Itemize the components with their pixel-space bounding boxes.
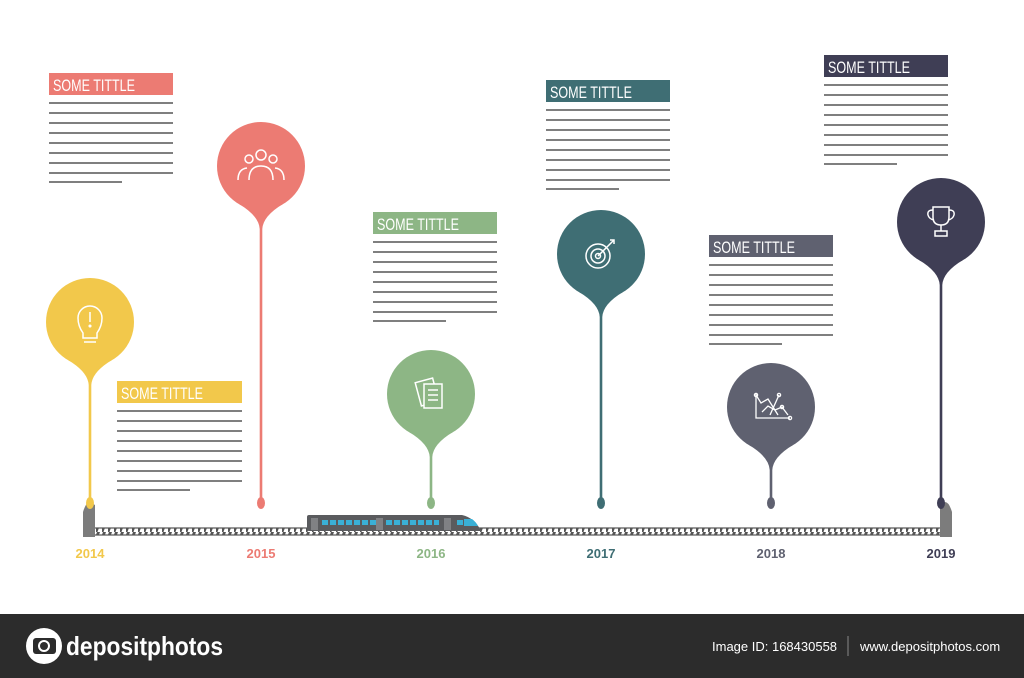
logo: depositphotos [66, 631, 223, 661]
text block 2018 [709, 235, 833, 344]
text block 2016 [373, 212, 497, 321]
text block 2017 [546, 80, 670, 189]
text block 2016: SOME TITTLE [377, 215, 459, 234]
icon: target [586, 240, 614, 268]
icon: team [238, 150, 284, 180]
text block 2019 [824, 55, 948, 164]
years: 2016 [417, 546, 445, 561]
text block 2014: SOME TITTLE [121, 384, 203, 403]
train [307, 515, 481, 531]
years: 2018 [757, 546, 785, 561]
text block 2018: SOME TITTLE [713, 238, 795, 257]
footer bar: www.depositphotos.com [859, 639, 1000, 654]
pin 2016 [387, 350, 475, 509]
text block 2014 [117, 381, 242, 490]
pin 2019 [897, 178, 985, 509]
icon: trophy [928, 207, 954, 236]
logo [26, 628, 223, 664]
footer bar [0, 614, 1024, 678]
icon: bulb [78, 306, 102, 342]
text block 2015 [49, 73, 173, 182]
years: 2019 [927, 546, 955, 561]
icon: chart [754, 393, 792, 420]
pin 2015 [217, 122, 305, 509]
footer bar: Image ID: 168430558 [712, 639, 837, 654]
rail track [83, 502, 952, 537]
pin 2018 [727, 363, 815, 509]
years [76, 546, 955, 561]
text block 2019: SOME TITTLE [828, 58, 910, 77]
years: 2014 [76, 546, 105, 561]
years: 2015 [247, 546, 275, 561]
text block 2017: SOME TITTLE [550, 83, 632, 102]
text block 2015: SOME TITTLE [53, 76, 135, 95]
pin 2014 [46, 278, 134, 509]
pin 2017 [557, 210, 645, 509]
icon: documents [415, 378, 442, 408]
years: 2017 [587, 546, 615, 561]
